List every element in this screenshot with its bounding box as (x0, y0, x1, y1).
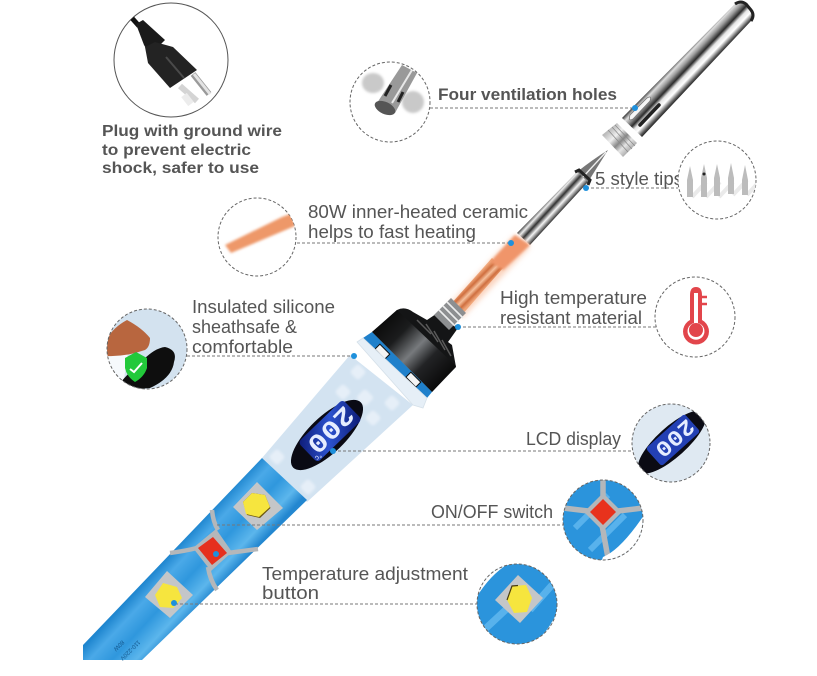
callout: silicone sheath (100, 296, 357, 392)
LCD display: °c (313, 452, 323, 462)
LCD display: 200 (300, 399, 360, 459)
material label: resistant material (500, 307, 642, 328)
silicone ring (107, 309, 187, 389)
plug caption: to prevent electric (102, 142, 251, 159)
silicone ring (357, 338, 427, 408)
switch dot (213, 551, 219, 557)
plug caption: Plug with ground wire (102, 123, 282, 140)
vent dot (632, 105, 638, 111)
LCD display (281, 389, 373, 481)
callout: plug (102, 3, 282, 177)
plug circle (114, 3, 228, 117)
temperature ring (477, 564, 557, 644)
material dot (455, 324, 461, 330)
soldering tip (517, 150, 608, 245)
icon: button close-up (478, 566, 555, 634)
callout: style tips (583, 141, 757, 219)
temperature dot (171, 600, 177, 606)
icon: five tips (687, 163, 757, 197)
icon: finger and shield (107, 320, 175, 389)
switch label: ON/OFF switch (431, 501, 553, 522)
silicone circle (107, 309, 187, 389)
icon: vented tube (362, 65, 424, 118)
callout: on/off switch (213, 480, 644, 565)
material label (500, 287, 647, 328)
silicone sleeve (262, 355, 413, 502)
callout: LCD display (330, 401, 715, 483)
switch circle (563, 480, 643, 560)
icon: ceramic rod (225, 213, 295, 253)
LCD ring (632, 404, 710, 482)
LCD leader line (333, 450, 632, 452)
callout: ceramic heater (218, 198, 528, 276)
red on/off switch (193, 529, 232, 571)
handle marking: 80W (112, 639, 125, 652)
lower temperature button (145, 571, 193, 618)
switch ring (563, 480, 643, 560)
LCD circle (632, 404, 710, 482)
black cap (372, 308, 458, 392)
material label: High temperature (500, 287, 647, 308)
ceramic circle (218, 198, 296, 276)
handle marking: 110-220V (118, 639, 141, 661)
silicone dot (351, 353, 357, 359)
callout: ventilation holes (350, 62, 638, 142)
thermometer circle (655, 277, 735, 357)
temperature label: Temperature adjustment (262, 563, 468, 584)
temperature circle (477, 564, 557, 644)
knurled collar (602, 123, 637, 157)
ceramic dot (508, 240, 514, 246)
icon: thermometer (683, 287, 709, 345)
ceramic leader line (297, 242, 511, 244)
silicone label: Insulated silicone (192, 296, 335, 317)
soldering iron (83, 2, 753, 661)
plug caption (102, 123, 282, 177)
blue band (363, 332, 432, 398)
vent leader line (430, 107, 635, 109)
blue handle (83, 458, 307, 661)
callout: temperature adjustment (171, 560, 558, 648)
tips leader line (586, 187, 678, 189)
silicone leader line (187, 355, 354, 357)
silicone label: sheathsafe & (192, 316, 298, 337)
icon: switch close-up (563, 480, 644, 565)
tips dot (583, 185, 589, 191)
threaded metal connector (434, 298, 466, 330)
tips circle (678, 141, 756, 219)
sleeve clover pattern (269, 364, 400, 495)
icon: LCD close-up: 200 (649, 413, 699, 461)
vent circle (350, 62, 430, 142)
material leader line (458, 326, 656, 328)
silicone label: comfortable (192, 336, 293, 357)
icon: LCD close-up (638, 412, 705, 474)
icon: plug (131, 17, 210, 104)
callout: high temperature material (455, 277, 735, 357)
switch leader line (217, 524, 564, 526)
tips label: 5 style tips (595, 168, 683, 189)
plug caption: shock, safer to use (102, 160, 259, 177)
ceramic label (308, 201, 528, 242)
LCD dot (330, 448, 336, 454)
switch cross lines (170, 510, 258, 590)
upper temperature button (233, 482, 283, 530)
ceramic label: 80W inner-heated ceramic (308, 201, 528, 222)
ceramic label: helps to fast heating (308, 221, 476, 242)
temperature label: button (262, 582, 319, 603)
silicone label (192, 296, 335, 357)
vent label: Four ventilation holes (438, 86, 617, 104)
outer steel tube (622, 2, 753, 137)
temperature label (262, 563, 468, 603)
copper heating element (449, 235, 530, 318)
LCD label: LCD display (526, 428, 622, 449)
temperature leader line (175, 603, 477, 605)
